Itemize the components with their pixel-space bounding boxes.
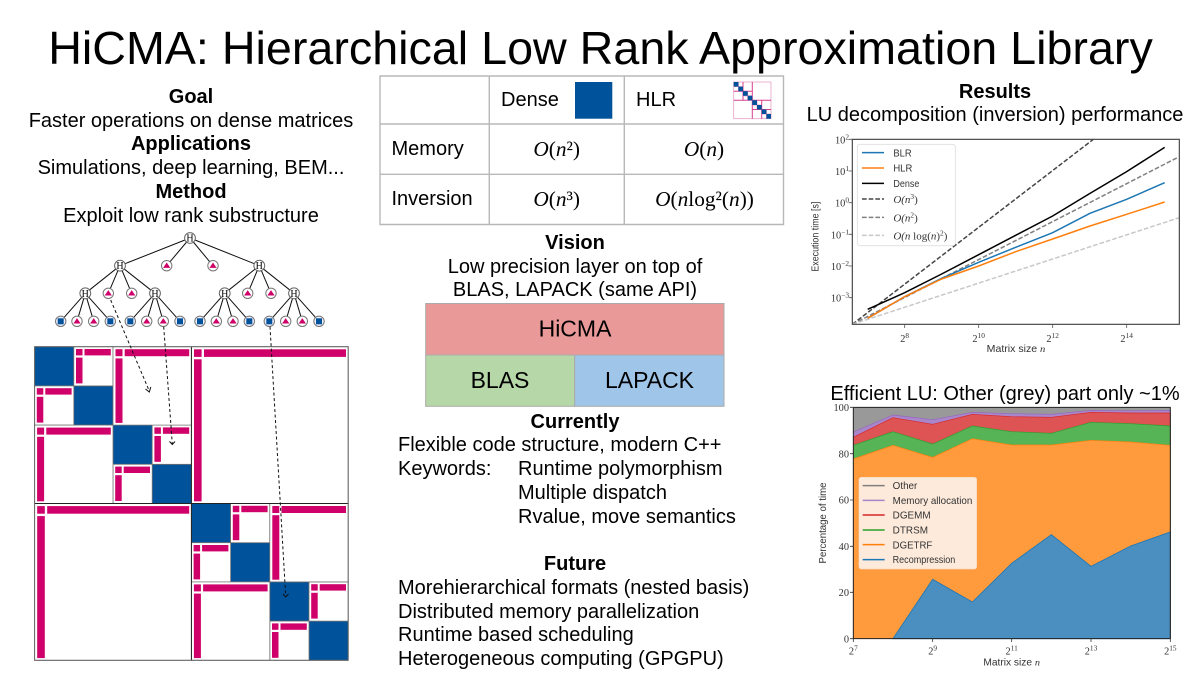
axis title: percentage of time: Percentage of time: [818, 482, 829, 563]
complexity table: HLR: [636, 89, 676, 111]
area: DGETRF: [853, 439, 1170, 639]
text block: goal, applications, method: Faster operations on dense matrices: [29, 110, 353, 132]
text block: currently: Multiple dispatch: [518, 482, 667, 504]
text block: goal, applications, method: Exploit low rank substructure: [63, 205, 319, 227]
y axis tick labels: 10: [831, 230, 841, 241]
legend: Dense: [893, 179, 919, 190]
x axis tick labels: 13: [1090, 644, 1098, 653]
legend: O(n: [893, 212, 910, 224]
text block: currently: Flexible code structure, modern C++: [398, 434, 722, 456]
text block: currently: Rvalue, move semantics: [518, 506, 736, 528]
text block: currently: Currently: [531, 411, 620, 433]
y axis tick labels: 80: [839, 449, 849, 460]
legend: Recompression: [893, 555, 955, 566]
x axis tick labels: [849, 644, 1177, 658]
line: O(n log(n)^2): [852, 218, 1179, 324]
complexity table: Dense: [501, 89, 559, 111]
x axis tick labels: 2: [849, 647, 854, 658]
heading: results: Results: [959, 81, 1031, 103]
x axis tick labels: 2: [1085, 647, 1090, 658]
x axis tick labels: 2: [928, 647, 933, 658]
heading: results: LU decomposition (inversion) performance: [807, 104, 1183, 126]
legend: 2: [910, 210, 914, 219]
legend: 2: [940, 228, 944, 237]
x axis tick labels: 2: [972, 334, 978, 345]
line: BLR: [868, 183, 1165, 318]
software stack diagram: HiCMA: [539, 316, 612, 342]
x axis tick labels: 9: [933, 644, 937, 653]
y axis tick labels: 2: [845, 132, 849, 141]
area: DTRSM: [853, 422, 1170, 639]
legend: BLR: [893, 148, 912, 159]
y axis tick labels: 100: [833, 403, 849, 414]
line: O(n^2): [852, 158, 1177, 324]
legend: DGETRF: [893, 540, 932, 551]
layer: BLAS: [426, 355, 575, 406]
x axis tick labels: 2: [1046, 334, 1052, 345]
area: DGEMM: [853, 412, 1170, 639]
text block: future: Morehierarchical formats (nested basis): [398, 577, 749, 599]
heading: efficient LU: Efficient LU: Other (grey) part only ~1%: [830, 383, 1180, 405]
title: HiCMA: Hierarchical Low Rank Approximation Library: [48, 22, 1153, 74]
x axis tick labels: 2: [1006, 647, 1011, 658]
x axis tick labels: 15: [1169, 644, 1177, 653]
legend: ): [914, 212, 918, 224]
x axis tick labels: 12: [1052, 331, 1059, 340]
layer: HiCMA: [426, 304, 724, 355]
text block: goal, applications, method: Applications: [131, 133, 251, 155]
text block: currently: [398, 411, 736, 528]
text block: future: Runtime based scheduling: [398, 624, 634, 646]
x axis tick labels: 7: [854, 644, 858, 653]
complexity table: [380, 76, 784, 224]
x axis tick labels: [900, 331, 1133, 345]
cluster tree diagram: H: [256, 261, 263, 272]
line chart: LU execution time: [810, 132, 1179, 355]
y axis tick labels: [833, 403, 849, 645]
layer: LAPACK: [575, 355, 724, 406]
legend: DTRSM: [893, 525, 928, 536]
cluster tree diagram: H: [290, 289, 298, 300]
cluster tree diagram: H: [82, 289, 89, 300]
y axis tick labels: 40: [839, 542, 849, 553]
heading: results: [807, 81, 1183, 126]
hierarchical matrix diagram: [35, 347, 348, 660]
text block: currently: Keywords:: [398, 458, 491, 480]
text block: goal, applications, method: Method: [155, 181, 227, 203]
line: Dense: [868, 147, 1165, 309]
text block: vision: Low precision layer on top of: [448, 256, 703, 278]
text block: future: [398, 553, 749, 670]
x axis tick labels: 2: [1120, 334, 1126, 345]
text block: vision: Vision: [545, 232, 605, 254]
legend: [859, 477, 977, 569]
cluster tree diagram: H: [221, 289, 228, 300]
y axis tick labels: 10: [831, 294, 841, 305]
text block: vision: [448, 232, 703, 301]
axis title: execution time: Execution time [s]: [810, 202, 821, 272]
x axis tick labels: 2: [900, 334, 905, 345]
arrow: tree leaf to dense block: [270, 327, 288, 597]
y axis tick labels: −3: [841, 291, 849, 300]
area: recompression: [893, 532, 1170, 639]
y axis tick labels: 60: [839, 496, 849, 507]
complexity table: O(n²): [533, 137, 580, 161]
complexity table: O(n): [684, 137, 724, 161]
axis title: matrix size: Matrix size n: [987, 344, 1046, 355]
x axis tick labels: 14: [1126, 331, 1133, 340]
legend: Memory allocation: [893, 496, 972, 507]
cluster tree diagram: H: [151, 289, 159, 300]
text block: goal, applications, method: [29, 86, 353, 227]
line: HLR: [868, 202, 1165, 318]
x axis tick labels: 2: [1164, 647, 1169, 658]
stacked area chart: share of time: [818, 403, 1177, 668]
area: memory allocation: [853, 410, 1170, 639]
software stack diagram: [426, 304, 724, 406]
legend: ): [914, 194, 918, 206]
legend: O(n: [893, 194, 910, 206]
complexity table: O(n³): [533, 187, 580, 211]
legend: [857, 144, 955, 246]
software stack diagram: LAPACK: [605, 367, 695, 393]
text block: future: Distributed memory parallelization: [398, 601, 699, 623]
axis title: matrix size: Matrix size n: [983, 657, 1040, 668]
icon: hierarchical low rank matrix: [734, 82, 771, 119]
text block: future: Heterogeneous computing (GPGPU): [398, 648, 724, 670]
legend: O(n log(n): [893, 230, 940, 242]
y axis tick labels: 0: [845, 196, 849, 205]
cluster tree diagram: H: [186, 234, 194, 244]
text block: goal, applications, method: Simulations, deep learning, BEM...: [38, 157, 344, 179]
arrow: tree leaf to low rank block: [164, 327, 175, 444]
y axis tick labels: 20: [839, 588, 849, 599]
legend: Other: [893, 481, 918, 492]
y axis tick labels: 0: [844, 634, 849, 645]
y axis tick labels: [831, 132, 849, 305]
text block: future: Future: [544, 553, 606, 575]
legend: 3: [910, 192, 914, 201]
y axis tick labels: 10: [831, 262, 841, 273]
y axis tick labels: 1: [845, 164, 849, 173]
legend: HLR: [893, 164, 912, 175]
y axis tick labels: −1: [841, 227, 849, 236]
legend: DGEMM: [893, 511, 931, 522]
icon: dense matrix: [575, 82, 612, 119]
cluster tree diagram: [56, 233, 324, 326]
complexity table: Inversion: [392, 188, 473, 210]
software stack diagram: BLAS: [471, 367, 529, 393]
x axis tick labels: 8: [905, 331, 909, 340]
legend: ): [944, 230, 948, 242]
y axis tick labels: 10: [835, 167, 845, 178]
complexity table: Memory: [392, 138, 464, 160]
arrow: tree node to matrix block: [111, 300, 151, 392]
text block: vision: BLAS, LAPACK (same API): [453, 279, 697, 301]
cluster tree diagram: H: [116, 261, 124, 272]
complexity table: O(nlog²(n)): [655, 187, 754, 211]
x axis tick labels: 10: [978, 331, 985, 340]
y axis tick labels: 10: [835, 135, 845, 146]
text block: currently: Runtime polymorphism: [518, 458, 723, 480]
x axis tick labels: 11: [1011, 644, 1018, 653]
line: O(n^3): [852, 139, 1093, 324]
y axis tick labels: −2: [841, 259, 849, 268]
y axis tick labels: 10: [835, 199, 845, 210]
text block: goal, applications, method: Goal: [169, 86, 213, 108]
